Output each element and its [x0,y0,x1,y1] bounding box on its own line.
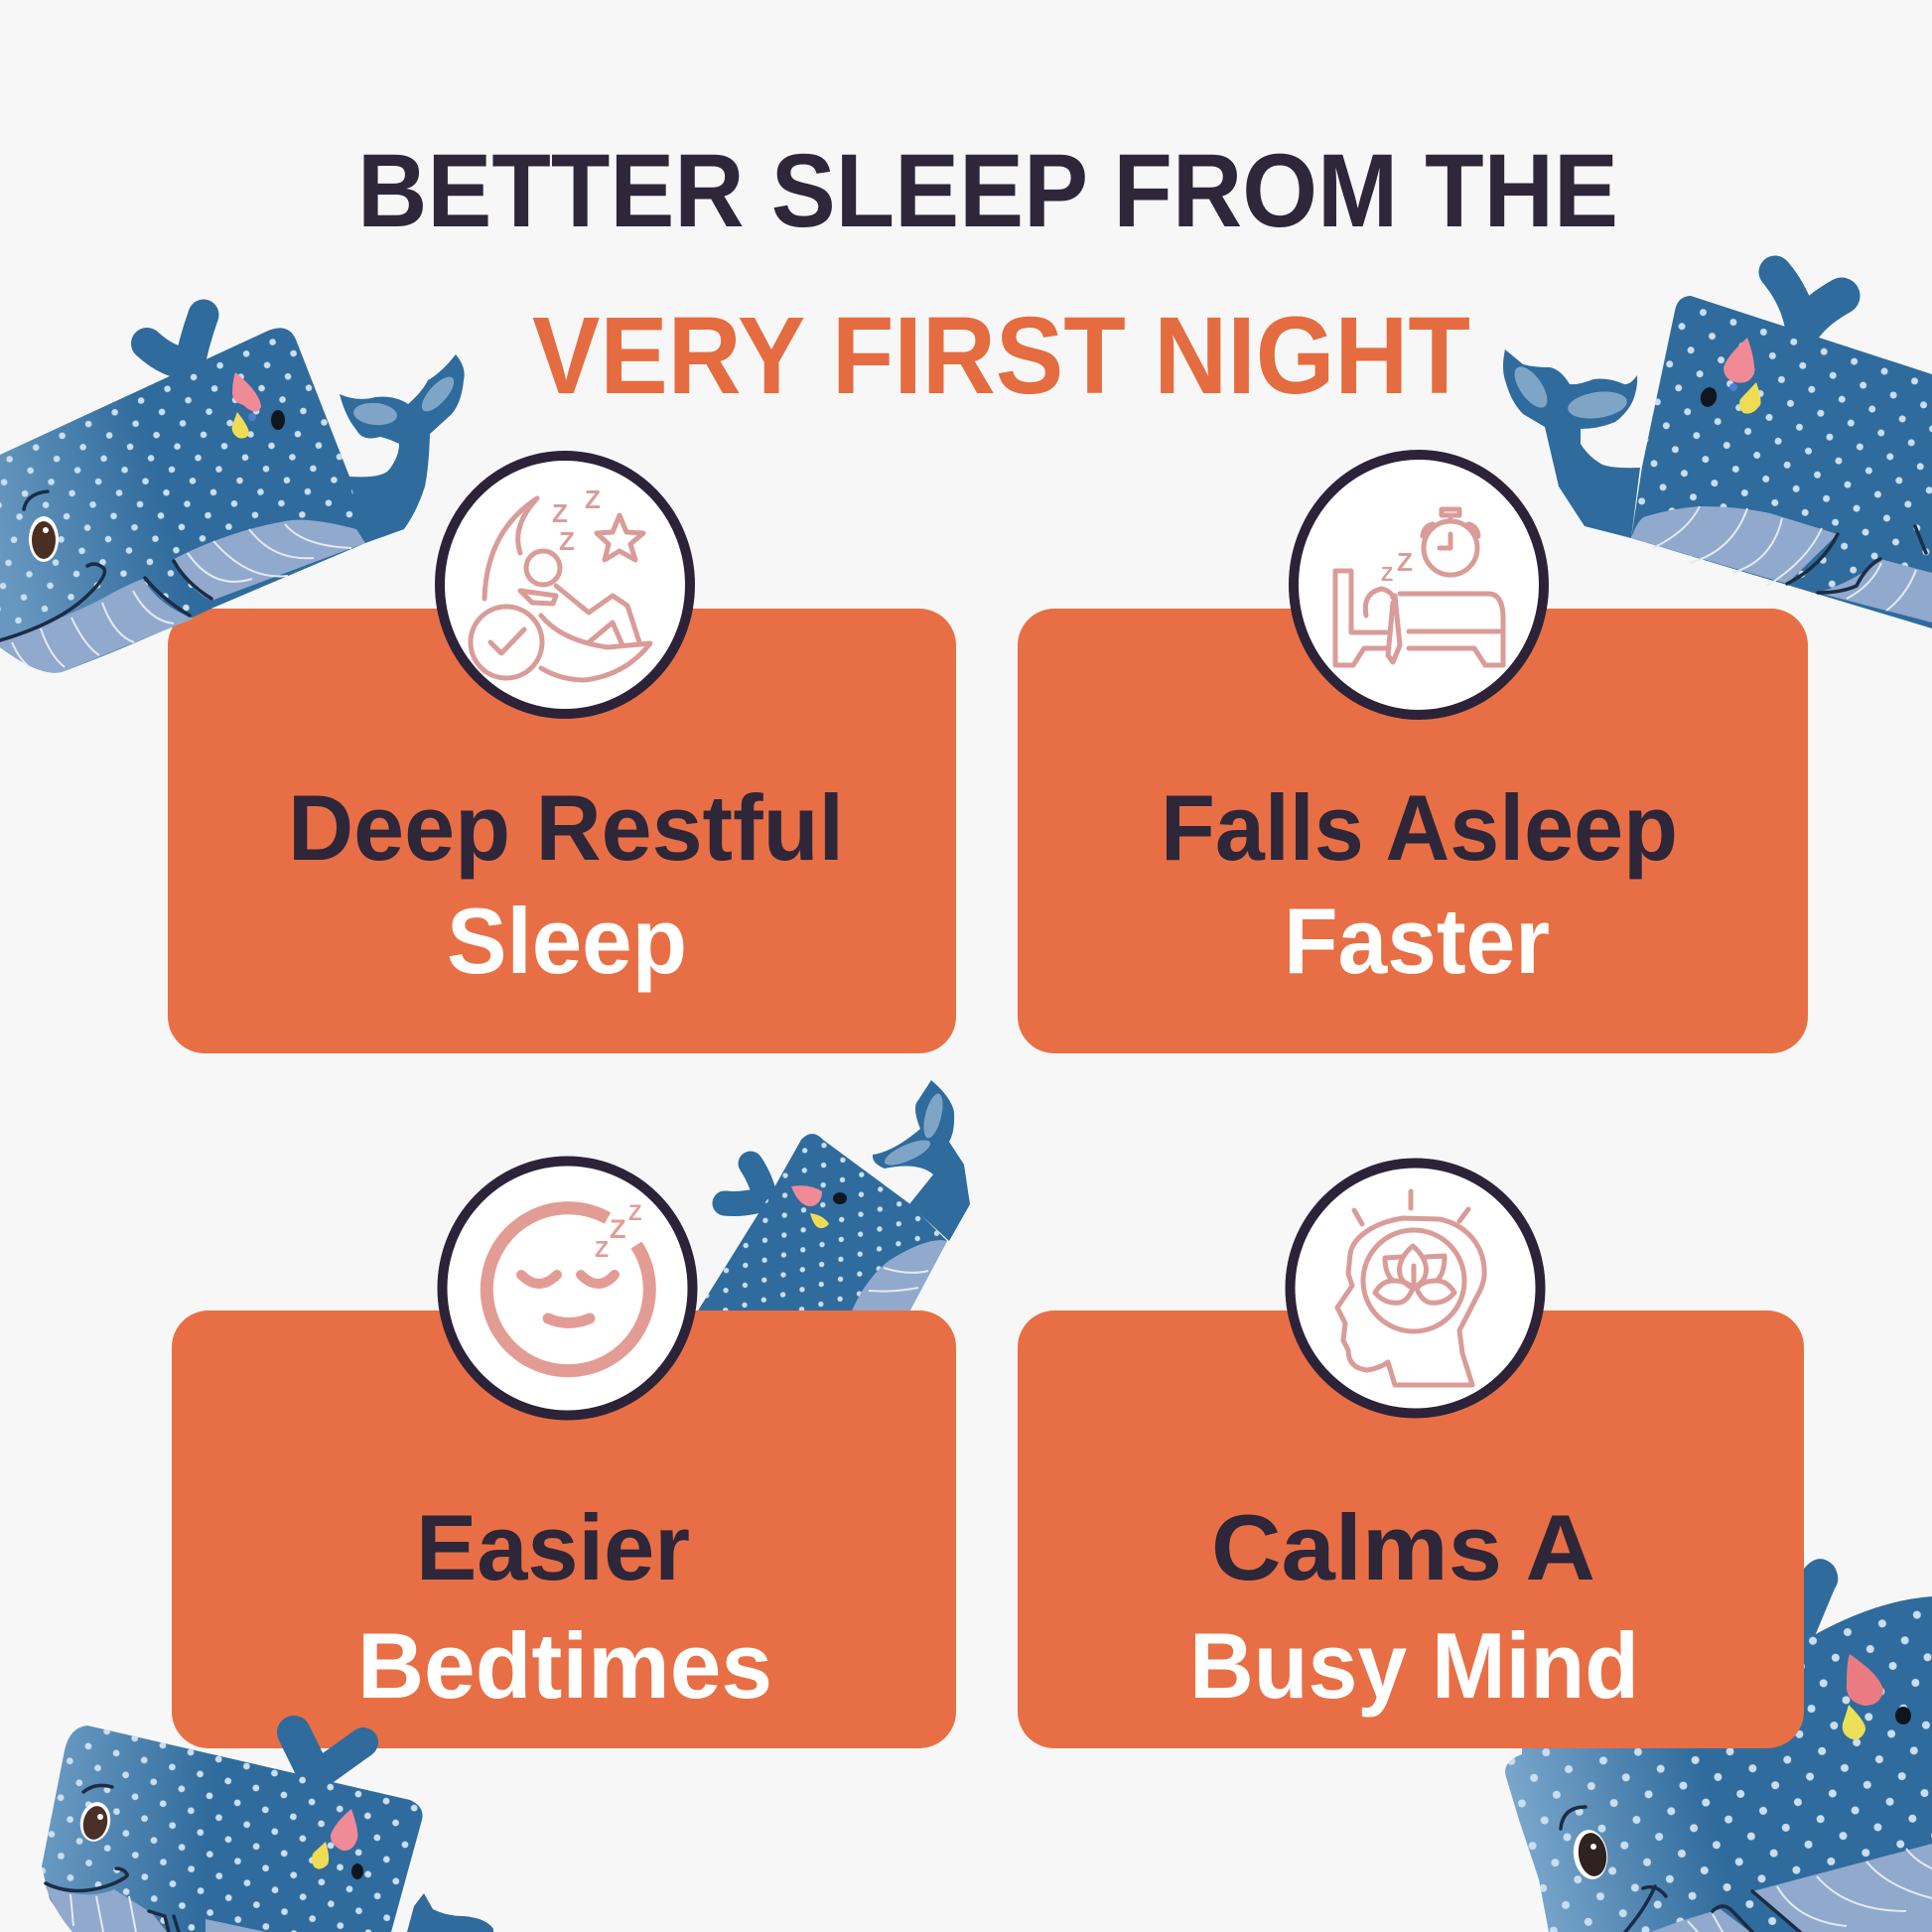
heading line: Faster: Faster [1284,889,1550,993]
icon: moon and sleeper: Z [552,498,568,528]
icon: moon and sleeper [440,456,690,714]
heading line: Calms A: Calms A [1211,1495,1595,1599]
heading line: Sleep: Sleep [447,889,687,993]
title [357,133,1618,417]
heading line: Busy Mind: Busy Mind [1189,1613,1639,1718]
heading line: Bedtimes: Bedtimes [357,1613,772,1718]
icon: bed and alarm clock: Z [1381,564,1393,586]
icon: sleeping face: Z [595,1236,609,1262]
heading line: Falls Asleep: Falls Asleep [1161,775,1678,880]
heading line: Deep Restful: Deep Restful [288,775,844,880]
icon: bed and alarm clock [1294,455,1544,715]
icon: sleeping face: Z [610,1214,625,1244]
card background [1018,609,1808,1053]
whale: top right [1503,272,1932,628]
icon: bed and alarm clock: Z [1397,547,1413,577]
whale: bottom left [42,1725,493,1932]
panel: falls asleep faster [1018,455,1808,1053]
title line 2: VERY FIRST NIGHT [532,295,1470,417]
card background [1018,1311,1804,1748]
panel: easier bedtimes [172,1162,956,1748]
icon: moon and sleeper: Z [559,526,575,556]
title line 1: BETTER SLEEP FROM THE [357,133,1618,249]
icon: sleeping face: Z [628,1200,641,1225]
whale: peeking behind card 3 [695,1080,970,1315]
card background [172,1311,956,1748]
card background [168,609,956,1053]
icon: moon and sleeper: Z [585,484,601,514]
icon: sleeping face [443,1162,693,1416]
icon: head with lotus [1291,1164,1541,1414]
panel: deep restful sleep [168,456,956,1053]
whale: behind card 4 [1505,1559,1932,1932]
whale: top left [0,315,465,673]
heading line: Easier: Easier [416,1495,690,1599]
panel: calms a busy mind [1018,1164,1804,1748]
